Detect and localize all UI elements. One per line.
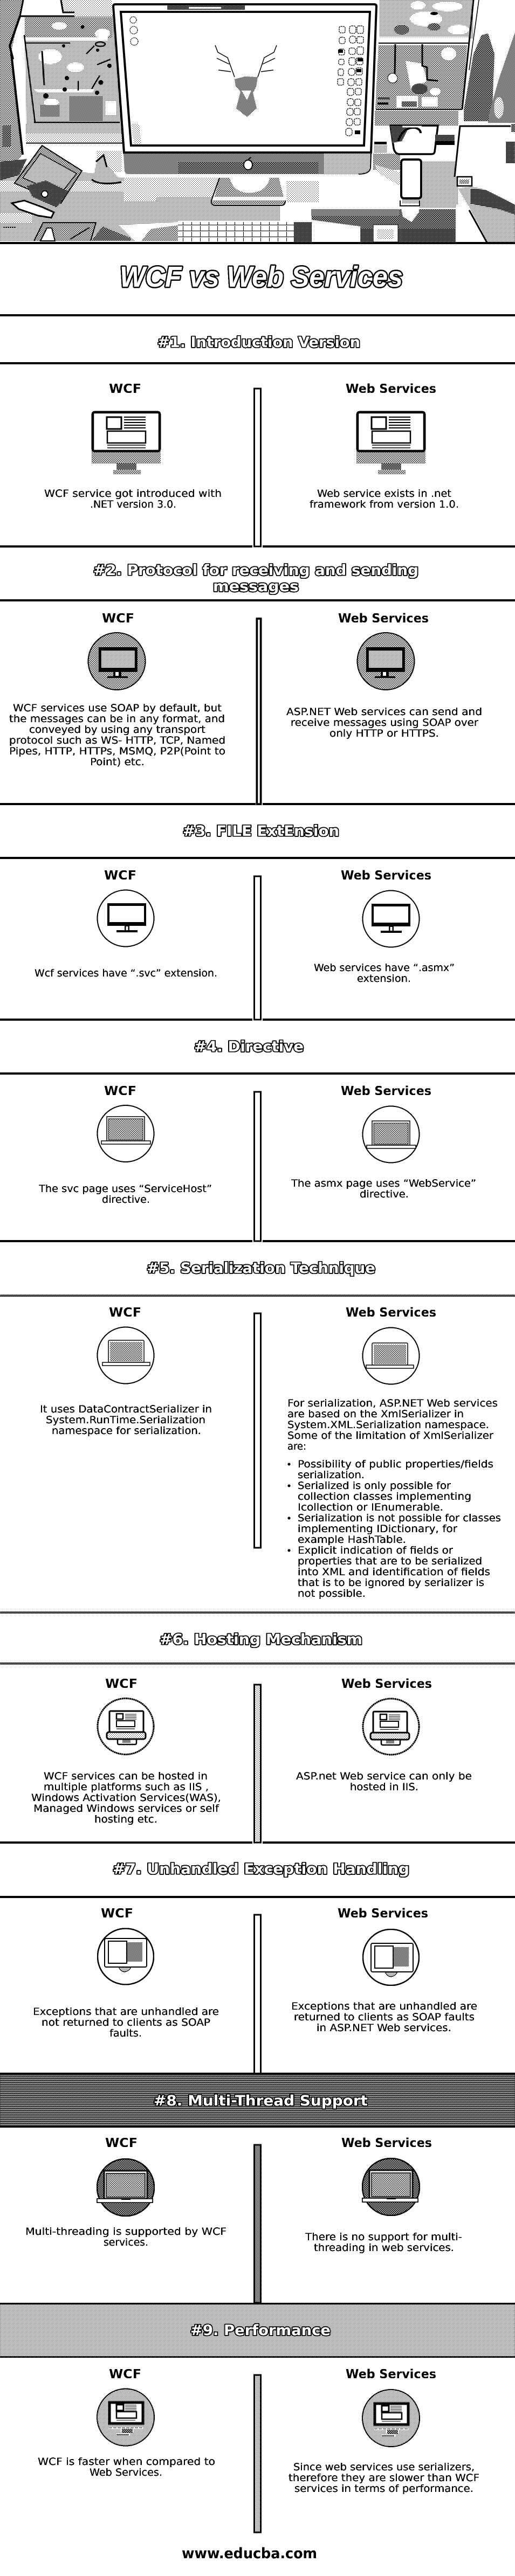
Web Services text [296, 1770, 472, 1793]
column title WCF: WCF [109, 1306, 141, 1320]
icon: laptop circle WCF [97, 2159, 154, 2216]
icon: monitor circle WCF [98, 1928, 154, 1984]
section 2: protocol [9, 562, 482, 804]
WCF text: WCF services use SOAP by default, but [13, 702, 222, 714]
Web Services text: extension. [357, 973, 411, 985]
WCF text [44, 488, 222, 510]
Web Services limitation list: not possible. [298, 1588, 366, 1599]
section 5: serialization technique [40, 1260, 501, 1599]
WCF text [33, 2006, 219, 2039]
WCF text [25, 2226, 226, 2248]
Web Services text: hosted in IIS. [350, 1781, 418, 1793]
WCF text: faults. [109, 2027, 142, 2039]
WCF text: Web Services. [90, 2467, 162, 2478]
Web Services text [314, 962, 455, 985]
section 8: multi-thread support [0, 2073, 515, 2303]
Web Services intro text: are: [287, 1441, 306, 1452]
column title Web Services: Web Services [341, 869, 431, 883]
column title Web Services: Web Services [346, 1306, 436, 1320]
column title Web Services: Web Services [338, 1907, 428, 1921]
divider [257, 619, 261, 804]
icon: monitor circle Web Services [363, 1699, 419, 1755]
icon: monitor circle Web Services [363, 1929, 419, 1985]
icon: laptop circle WCF [97, 1105, 154, 1162]
heading: messages [213, 578, 299, 595]
column title WCF: WCF [104, 1084, 136, 1098]
WCF text: .NET version 3.0. [90, 498, 176, 510]
icon: laptop circle Web Services [362, 1106, 420, 1163]
Web Services limitation list: into XML and identification of fields [298, 1566, 490, 1578]
column title Web Services: Web Services [341, 1677, 432, 1691]
WCF text: protocol such as WS- HTTP, TCP, Named [9, 735, 225, 746]
heading band [0, 2303, 515, 2358]
Web Services text: services in terms of performance. [294, 2483, 473, 2495]
Web Services limitation list: collection classes implementing [298, 1491, 471, 1502]
WCF text: namespace for serialization. [52, 1425, 201, 1437]
WCF text [38, 1183, 212, 1206]
divider [255, 389, 261, 546]
Web Services text: ASP.NET Web services can send and [286, 706, 482, 718]
heading: #2. Protocol for receiving and sending [93, 562, 418, 579]
Web Services limitation list: Possibility of public properties/fields [298, 1458, 493, 1470]
Web Services intro text: System.XML.Serialization namespace. [287, 1419, 489, 1431]
Web Services text: Web services have “.asmx” [314, 962, 455, 974]
WCF text: WCF service got introduced with [44, 488, 222, 500]
icon: monitor circle WCF [97, 2388, 154, 2446]
heading: #5. Serialization Technique [147, 1260, 375, 1277]
icon: monitor circle WCF [88, 633, 146, 690]
Web Services limitation list: example HashTable. [298, 1534, 406, 1546]
WCF text: multiple platforms such as IIS , [44, 1781, 209, 1793]
Web Services text: in ASP.NET Web services. [317, 2022, 451, 2034]
section 6: hosting mechanism [31, 1631, 472, 1843]
heading: #9. Performance [190, 2322, 331, 2339]
WCF text [40, 1403, 212, 1437]
Web Services text: therefore they are slower than WCF [289, 2472, 479, 2484]
Web Services text: receive messages using SOAP over [291, 717, 478, 729]
section 7: unhandled exception handling [33, 1861, 477, 2074]
Web Services text: Exceptions that are unhandled are [291, 2000, 477, 2012]
Web Services intro text: Some of the limitation of XmlSerializer [287, 1430, 493, 1442]
Web Services text: framework from version 1.0. [310, 498, 459, 510]
Web Services limitation list: Explicit indication of fields or [298, 1545, 453, 1556]
WCF text: conveyed by using any transport [29, 724, 205, 736]
Web Services text: The asmx page uses “WebService” [291, 1178, 476, 1189]
WCF text: Managed Windows services or self [33, 1803, 219, 1815]
section divider lines [0, 314, 515, 1898]
Web Services text [289, 2461, 479, 2495]
WCF text: System.RunTime.Serialization [46, 1414, 205, 1426]
Web Services text [291, 2000, 477, 2034]
heading: #1. Introduction Version [157, 334, 360, 351]
Web Services limitation list: Serialization is not possible for classes [298, 1512, 501, 1524]
header photo: desk with computer monitor [0, 0, 515, 244]
section 1: introduction version [44, 334, 459, 546]
column title Web Services: Web Services [338, 612, 429, 626]
heading: #8. Multi-Thread Support [154, 2093, 368, 2109]
section 3: file extension [35, 823, 455, 1020]
WCF text: Multi-threading is supported by WCF [25, 2226, 226, 2238]
main title: WCF vs Web Services [120, 261, 403, 293]
Web Services text: threading in web services. [314, 2242, 454, 2254]
column title Web Services: Web Services [346, 382, 436, 396]
Web Services limitation list: that is to be ignored by serializer is [298, 1577, 484, 1589]
Web Services limitation list: Icollection or IEnumerable. [298, 1501, 443, 1513]
Web Services text: Web service exists in .net [317, 488, 451, 500]
WCF text [31, 1770, 221, 1825]
WCF text: WCF services can be hosted in [44, 1770, 208, 1782]
icon: monitor circle WCF [97, 890, 154, 946]
divider [255, 1092, 261, 1241]
WCF text [38, 2456, 215, 2478]
Web Services limitation list: implementing IDictionary, for [298, 1523, 457, 1535]
WCF text: Exceptions that are unhandled are [33, 2006, 219, 2018]
WCF text: hosting etc. [94, 1813, 157, 1825]
icon: laptop circle WCF [97, 1327, 154, 1384]
heading: #6. Hosting Mechanism [160, 1631, 362, 1648]
section 9: performance [0, 2303, 515, 2532]
Web Services text: only HTTP or HTTPS. [329, 728, 439, 739]
column title WCF: WCF [109, 382, 141, 396]
icon: laptop circle Web Services [362, 1328, 420, 1384]
divider [255, 1313, 261, 1548]
divider [255, 1915, 261, 2074]
icon: monitor WCF [92, 412, 161, 474]
WCF text: Point) etc. [90, 756, 145, 768]
WCF text: Pipes, HTTP, HTTPs, MSMQ, P2P(Point to [9, 745, 225, 757]
WCF text: It uses DataContractSerializer in [40, 1403, 212, 1415]
heading band [0, 2073, 515, 2128]
WCF text: The svc page uses “ServiceHost” [38, 1183, 212, 1195]
Web Services intro text [287, 1397, 498, 1452]
icon: laptop circle Web Services [362, 2158, 420, 2215]
divider [255, 2375, 261, 2532]
WCF text: Windows Activation Services(WAS), [31, 1792, 221, 1804]
WCF text: directive. [102, 1194, 150, 1206]
icon: monitor circle Web Services [362, 890, 420, 947]
Web Services limitation list: properties that are to be serialized [298, 1555, 482, 1567]
divider [255, 2145, 261, 2303]
icon: monitor circle WCF [98, 1699, 154, 1755]
column title WCF: WCF [104, 869, 136, 883]
Web Services text: ASP.net Web service can only be [296, 1770, 472, 1782]
divider [255, 876, 261, 1020]
Web Services text: There is no support for multi- [305, 2231, 462, 2243]
heading [93, 562, 418, 595]
icon: monitor circle Web Services [357, 633, 414, 690]
column title Web Services: Web Services [346, 2367, 436, 2381]
WCF text: WCF is faster when compared to [38, 2456, 215, 2468]
heading: #4. Directive [194, 1038, 304, 1055]
Web Services text [305, 2231, 462, 2254]
Web Services text [310, 488, 459, 510]
Web Services limitation list: serialization. [298, 1469, 365, 1481]
Web Services text: directive. [360, 1188, 409, 1200]
Web Services text: Since web services use serializers, [293, 2461, 475, 2473]
column title WCF: WCF [105, 1677, 138, 1691]
section 4: directive [38, 1038, 476, 1241]
Web Services text [286, 706, 482, 739]
WCF text: services. [104, 2236, 148, 2248]
column title WCF: WCF [105, 2136, 138, 2150]
Web Services intro text: are based on the XmlSerializer in [287, 1408, 464, 1420]
column title WCF: WCF [109, 2367, 141, 2381]
icon: monitor circle Web Services [362, 2390, 420, 2447]
footer url: www.educba.com [182, 2545, 317, 2562]
Web Services limitation list: Serialized is only possible for [298, 1480, 451, 1492]
Web Services text: returned to clients as SOAP faults [294, 2011, 475, 2023]
Web Services text [291, 1178, 476, 1200]
Web Services intro text: For serialization, ASP.NET Web services [287, 1397, 498, 1409]
WCF text: the messages can be in any format, and [9, 713, 225, 725]
column title WCF: WCF [101, 1907, 133, 1921]
WCF text: not returned to clients as SOAP [42, 2017, 210, 2028]
WCF text [9, 702, 225, 768]
divider [255, 1685, 261, 1843]
heading: #3. FILE ExtEnsion [183, 823, 339, 840]
column title Web Services: Web Services [341, 2136, 432, 2150]
icon: monitor Web Services [356, 412, 425, 474]
Web Services limitation list [288, 1458, 501, 1599]
heading: #7. Unhandled Exception Handling [113, 1861, 409, 1878]
column title WCF: WCF [102, 612, 134, 626]
WCF text: Wcf services have “.svc” extension. [35, 967, 217, 979]
column title Web Services: Web Services [341, 1084, 431, 1098]
